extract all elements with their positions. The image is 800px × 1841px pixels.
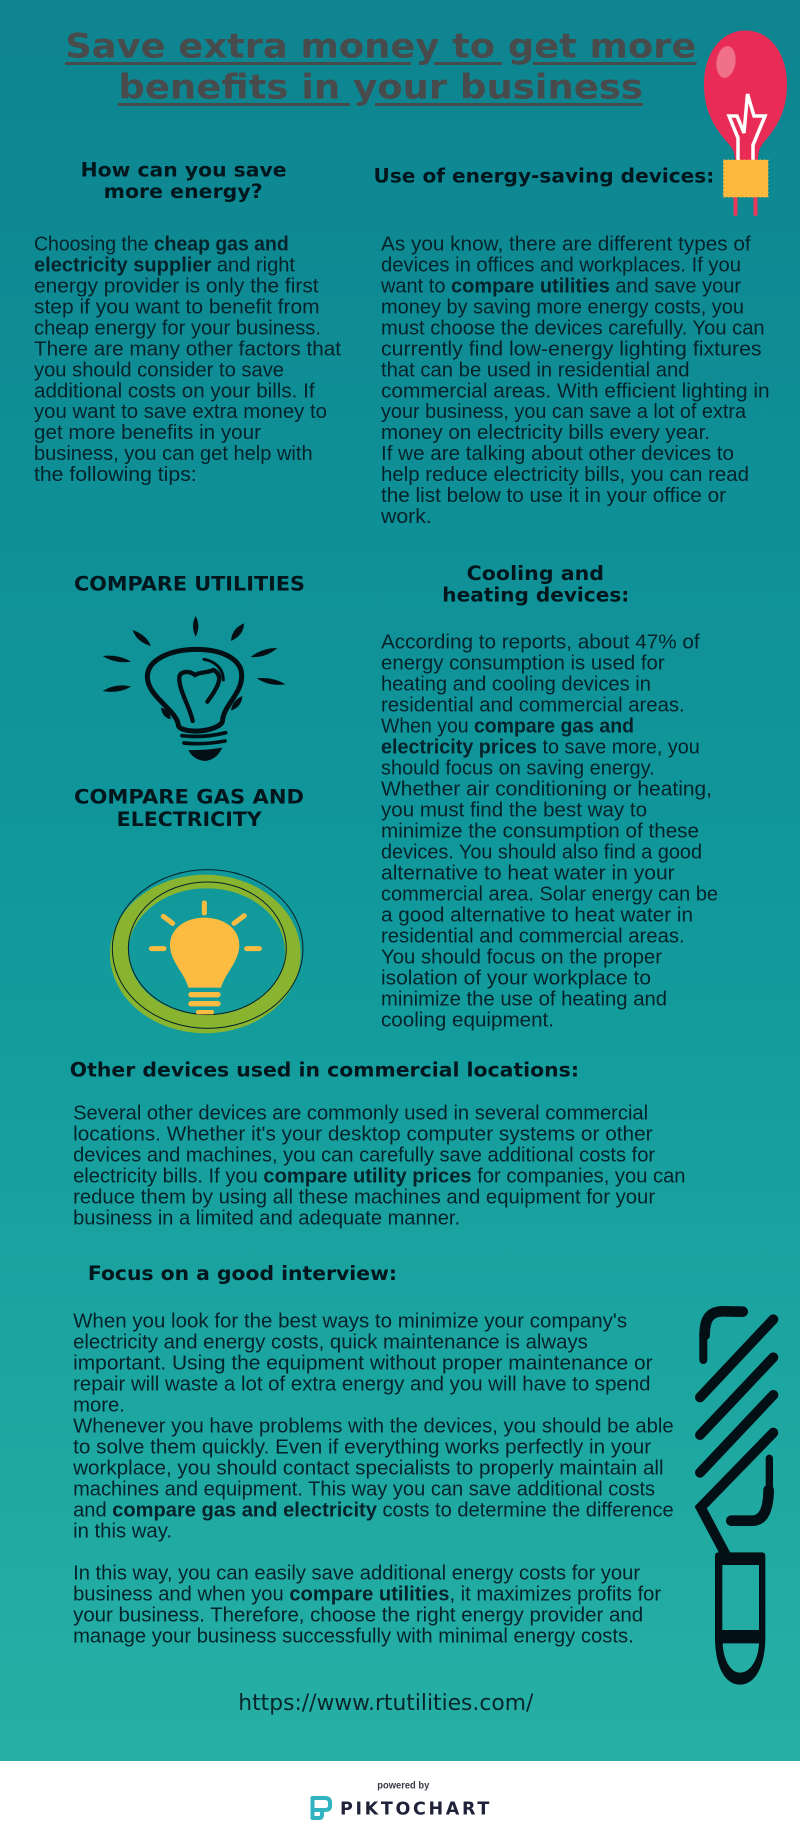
text block: devices: help reduce electricity bills, you can read bbox=[381, 463, 749, 486]
text block: devices: that can be used in residential and bbox=[381, 358, 690, 381]
text block: maintenance: in this way. bbox=[73, 1520, 172, 1543]
heading: how can you save: more energy? bbox=[104, 180, 263, 203]
heading: compare gas and electricity bbox=[74, 785, 304, 831]
text block: devices: devices in offices and workplaces. If you bbox=[381, 254, 741, 277]
text block: devices bbox=[380, 233, 770, 528]
title: benefits in your business bbox=[118, 67, 643, 107]
text block: cooling: alternative to heat water in your bbox=[381, 862, 675, 885]
text block: maintenance: manage your business successfully with minimal energy costs. bbox=[73, 1625, 634, 1648]
text block: intro: Choosing the cheap gas and bbox=[34, 233, 289, 256]
text block: cooling: heating and cooling devices in bbox=[381, 673, 651, 696]
title: Save extra money to get more bbox=[65, 26, 696, 66]
text block: intro: business, you can get help with bbox=[34, 442, 313, 465]
text block: other devices: reduce them by using all these machines and equipment for your bbox=[73, 1186, 655, 1209]
text block: maintenance bbox=[72, 1309, 674, 1648]
text block: devices: As you know, there are different types of bbox=[381, 233, 751, 256]
heading: use of energy-saving devices: Use of energy-saving devices: bbox=[374, 165, 714, 188]
footer: powered by piktochart bbox=[312, 1781, 489, 1819]
text block: intro: There are many other factors that bbox=[34, 337, 341, 360]
icon: black tool bbox=[700, 1311, 773, 1685]
text block: devices: work. bbox=[380, 505, 432, 528]
text block: intro: you should consider to save bbox=[34, 358, 284, 381]
text block: intro: get more benefits in your bbox=[34, 421, 261, 444]
text block: other devices bbox=[73, 1101, 686, 1230]
panel: other devices bbox=[70, 1059, 686, 1230]
text block: other devices: locations. Whether it's your desktop computer systems or other bbox=[73, 1122, 653, 1145]
text block: cooling: cooling equipment. bbox=[381, 1009, 554, 1032]
heading: how can you save: How can you save bbox=[81, 159, 287, 182]
heading: how can you save bbox=[81, 159, 287, 203]
text block: devices: commercial areas. With efficient lighting in bbox=[381, 379, 770, 402]
heading: cooling and heating devices bbox=[442, 562, 629, 607]
text block: cooling: According to reports, about 47% of bbox=[381, 631, 700, 654]
title bbox=[65, 26, 696, 107]
text block: devices: must choose the devices carefully. You can bbox=[381, 316, 765, 339]
text block: maintenance: business and when you compare utilities, it maximizes profits for bbox=[73, 1583, 661, 1606]
footer: powered by piktochart: PIKTOCHART bbox=[340, 1799, 489, 1819]
text block: cooling: You should focus on the proper bbox=[381, 946, 662, 969]
text block: maintenance: When you look for the best ways to minimize your company's bbox=[73, 1309, 627, 1332]
panel: how can you save more energy bbox=[34, 159, 341, 486]
text block: maintenance: machines and equipment. This way you can save additional costs bbox=[73, 1478, 655, 1500]
text block: cooling: When you compare gas and bbox=[381, 715, 634, 738]
text block: cooling: commercial area. Solar energy can be bbox=[381, 883, 718, 906]
heading: compare utilities: COMPARE UTILITIES bbox=[74, 573, 305, 596]
heading: focus on a good interview: Focus on a good interview: bbox=[88, 1262, 397, 1285]
panel: use of energy-saving devices bbox=[374, 165, 770, 528]
text block: devices: your business, you can save a lot of extra bbox=[381, 400, 747, 423]
panel: cooling and heating devices bbox=[381, 562, 718, 1032]
text block: cooling: devices. You should also find a good bbox=[381, 841, 702, 864]
website url: https://www.rtutilities.com/ bbox=[238, 1691, 534, 1716]
text block: devices: currently find low-energy lighting fixtures bbox=[381, 337, 762, 360]
text block: intro: additional costs on your bills. If bbox=[34, 379, 315, 402]
text block: cooling: minimize the use of heating and bbox=[381, 988, 667, 1011]
text block: maintenance: important. Using the equipment without proper maintenance or bbox=[73, 1351, 653, 1374]
text block: cooling: minimize the consumption of these bbox=[381, 820, 699, 843]
icon: red light bulb bbox=[704, 30, 787, 216]
text block: cooling: Whether air conditioning or heating, bbox=[381, 778, 712, 801]
text block: devices: the list below to use it in your office or bbox=[381, 484, 726, 507]
icon: piktochart logo bbox=[312, 1798, 330, 1818]
text block: intro: electricity supplier and right bbox=[34, 254, 295, 277]
text block: devices: money by saving more energy costs, you bbox=[381, 296, 744, 318]
text block: maintenance: Whenever you have problems with the devices, you should be able bbox=[73, 1414, 674, 1438]
text block: intro: the following tips: bbox=[34, 463, 197, 486]
text block: intro: energy provider is only the first bbox=[34, 274, 319, 298]
text block: intro: cheap energy for your business. bbox=[34, 316, 321, 339]
panel: focus on a good interview bbox=[72, 1262, 674, 1648]
text block: cooling bbox=[381, 631, 718, 1032]
heading: compare gas and electricity: COMPARE GAS AND bbox=[74, 785, 304, 808]
text block: cooling: isolation of your workplace to bbox=[381, 967, 651, 990]
text block: maintenance: to solve them quickly. Even if everything works perfectly in your bbox=[73, 1436, 651, 1458]
text block: cooling: you must find the best way to bbox=[381, 799, 647, 822]
text block: maintenance: your business. Therefore, choose the right energy provider and bbox=[73, 1604, 643, 1627]
text block: cooling: a good alternative to heat water in bbox=[381, 904, 693, 927]
text block: other devices: devices and machines, you can carefully save additional costs for bbox=[73, 1143, 655, 1166]
text block: maintenance: electricity and energy costs, quick maintenance is always bbox=[73, 1330, 588, 1353]
footer: powered by piktochart: powered by bbox=[377, 1781, 430, 1792]
text block: cooling: energy consumption is used for bbox=[381, 652, 665, 675]
text block: other devices: electricity bills. If you compare utility prices for companies, you can bbox=[73, 1164, 686, 1188]
text block: cooling: residential and commercial areas. bbox=[381, 694, 685, 717]
text block: cooling: residential and commercial areas. bbox=[381, 925, 685, 948]
heading: cooling and heating devices: Cooling and bbox=[467, 562, 604, 585]
text block: cooling: electricity prices to save more, you bbox=[381, 736, 700, 759]
heading: cooling and heating devices: heating devices: bbox=[442, 584, 629, 607]
icon: yellow bulb in green ring bbox=[110, 870, 303, 1033]
text block: devices: money on electricity bills every year. bbox=[381, 421, 710, 444]
text block: other devices: business in a limited and adequate manner. bbox=[73, 1207, 460, 1230]
text block: maintenance: and compare gas and electricity costs to determine the difference bbox=[73, 1499, 674, 1522]
text block: maintenance: more. bbox=[73, 1393, 125, 1416]
text block: intro: step if you want to benefit from bbox=[34, 296, 320, 318]
text block: devices: If we are talking about other devices to bbox=[381, 442, 734, 465]
text block: maintenance: workplace, you should contact specialists to properly maintain all bbox=[72, 1456, 664, 1480]
text block: devices: want to compare utilities and save your bbox=[380, 274, 741, 298]
heading: compare gas and electricity: ELECTRICITY bbox=[117, 808, 263, 831]
text block: other devices: Several other devices are commonly used in several commercial bbox=[73, 1101, 648, 1124]
text block: intro bbox=[34, 233, 341, 486]
heading: other devices used in commercial locations: Other devices used in commercial locations: bbox=[70, 1059, 579, 1082]
text block: cooling: should focus on saving energy. bbox=[381, 757, 655, 780]
icon: black light bulb bbox=[103, 616, 285, 761]
text block: intro: you want to save extra money to bbox=[34, 400, 327, 423]
text block: maintenance: repair will waste a lot of extra energy and you will have to spend bbox=[73, 1372, 651, 1395]
text block: maintenance: In this way, you can easily save additional energy costs for your bbox=[73, 1562, 640, 1585]
